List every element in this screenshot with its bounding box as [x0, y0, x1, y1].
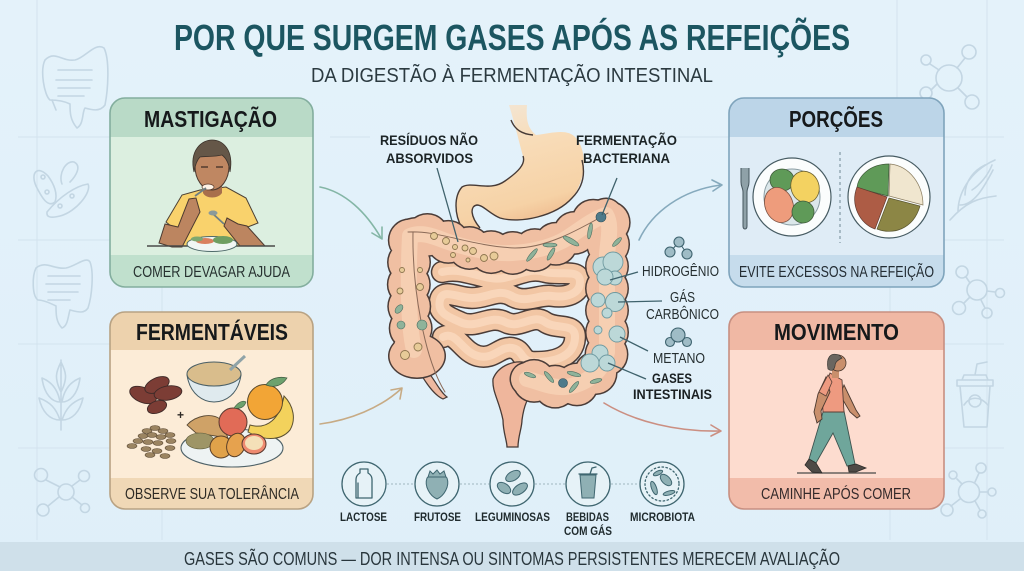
label: fermentação bacteriana: FERMENTAÇÃO	[576, 131, 677, 148]
icon row: microbiota: MICROBIOTA	[630, 512, 695, 524]
label: gases intestinais: INTESTINAIS	[633, 386, 712, 402]
decorative icon: molecule top right	[920, 45, 979, 109]
decorative icon: molecule right middle	[952, 266, 1004, 318]
decorative icon: intestine left middle	[33, 260, 92, 328]
illustration: small portion plate	[753, 158, 831, 236]
icon: hydrogen molecule	[665, 237, 692, 259]
arrow: intestine to movimento	[604, 403, 721, 436]
appendix	[422, 372, 447, 399]
label: hidrogênio	[610, 263, 719, 280]
bacterial cluster	[558, 212, 606, 388]
undigested residue particles	[397, 232, 498, 360]
caption: observe sua tolerância: OBSERVE SUA TOLERÂNCIA	[125, 484, 299, 503]
heading: mastigação: MASTIGAÇÃO	[144, 105, 277, 132]
small intestine	[439, 271, 580, 362]
label: resíduos não absorvidos: ABSORVIDOS	[386, 150, 473, 166]
decorative icon: molecule bottom left	[34, 468, 90, 516]
illustration: walking person	[797, 354, 876, 473]
illustration: balanced plate	[848, 156, 930, 238]
panel: movimento	[729, 312, 944, 509]
illustration: beans	[127, 373, 183, 416]
icon row: microbiota	[630, 462, 695, 524]
plus sign: +	[177, 408, 184, 422]
large intestine	[388, 213, 609, 392]
caption: evite excessos na refeição: EVITE EXCESSOS NA REFEIÇÃO	[739, 261, 934, 281]
illustration: man eating	[147, 140, 275, 252]
esophagus and stomach	[456, 105, 584, 228]
heading: movimento: MOVIMENTO	[774, 319, 899, 345]
icon: fork	[741, 168, 749, 229]
icon row: leguminosas: LEGUMINOSAS	[475, 512, 550, 524]
label: gás carbônico	[618, 289, 719, 323]
gas bubbles	[581, 252, 625, 372]
bacteria in colon	[393, 223, 623, 394]
label: fermentação bacteriana: BACTERIANA	[583, 150, 670, 166]
illustration: digestive system	[388, 105, 625, 447]
label: resíduos não absorvidos: RESÍDUOS NÃO	[380, 131, 478, 148]
footer band	[0, 542, 1024, 571]
decorative icon: wheat	[950, 160, 996, 220]
heading: porções: PORÇÕES	[789, 105, 883, 132]
icon: methane molecule	[666, 328, 692, 346]
panel: mastigação	[110, 98, 313, 287]
arrow: mastigação to intestine	[320, 187, 382, 239]
illustration: plate of foods and fruit	[181, 377, 293, 467]
decorative icon: cup	[957, 362, 993, 427]
decorative icon: leaf	[39, 360, 83, 430]
arrow: fermentáveis to intestine	[320, 388, 402, 424]
icon row: frutose: FRUTOSE	[414, 512, 461, 524]
icon row: bebidas com gás: COM GÁS	[564, 525, 612, 538]
label: gás carbônico: CARBÔNICO	[646, 306, 719, 323]
caption: comer devagar ajuda: COMER DEVAGAR AJUDA	[133, 264, 290, 281]
footer text: GASES SÃO COMUNS — DOR INTENSA OU SINTOMAS PERSISTENTES MERECEM AVALIAÇÃO	[184, 548, 840, 569]
illustration: bowl of grains	[187, 356, 245, 402]
label: gases intestinais: GASES	[652, 370, 692, 386]
label: metano	[620, 337, 705, 367]
caption: caminhe após comer: CAMINHE APÓS COMER	[761, 484, 911, 503]
title: POR QUE SURGEM GASES APÓS AS REFEIÇÕES	[174, 16, 850, 58]
heading: fermentáveis: FERMENTÁVEIS	[136, 318, 288, 345]
decorative icon: molecule bottom right	[941, 463, 996, 518]
divider	[839, 152, 841, 243]
decorative icon: bacteria	[34, 162, 89, 217]
arrow: intestine to porções	[639, 180, 722, 240]
label: resíduos não absorvidos	[380, 131, 478, 242]
label: metano: METANO	[653, 351, 705, 367]
icon row: bebidas com gás: BEBIDAS	[566, 512, 609, 524]
label: gases intestinais	[608, 363, 712, 402]
icon row: lactose	[340, 462, 387, 524]
panel: fermentáveis	[110, 312, 313, 509]
icon row: lactose: LACTOSE	[340, 512, 387, 524]
decorative icon: intestine top left	[43, 47, 108, 128]
label: hidrogênio: HIDROGÊNIO	[642, 263, 719, 280]
rectum	[493, 362, 534, 447]
illustration: lentils	[127, 426, 176, 458]
label: gás carbônico: GÁS	[670, 289, 695, 306]
dotted connectors	[387, 483, 639, 485]
icon row: bebidas com gás	[564, 462, 612, 538]
icon row: leguminosas	[475, 462, 550, 524]
subtitle: DA DIGESTÃO À FERMENTAÇÃO INTESTINAL	[311, 63, 713, 87]
icon row: frutose	[414, 462, 461, 524]
label: fermentação bacteriana	[576, 131, 677, 215]
panel: porções	[729, 98, 944, 287]
